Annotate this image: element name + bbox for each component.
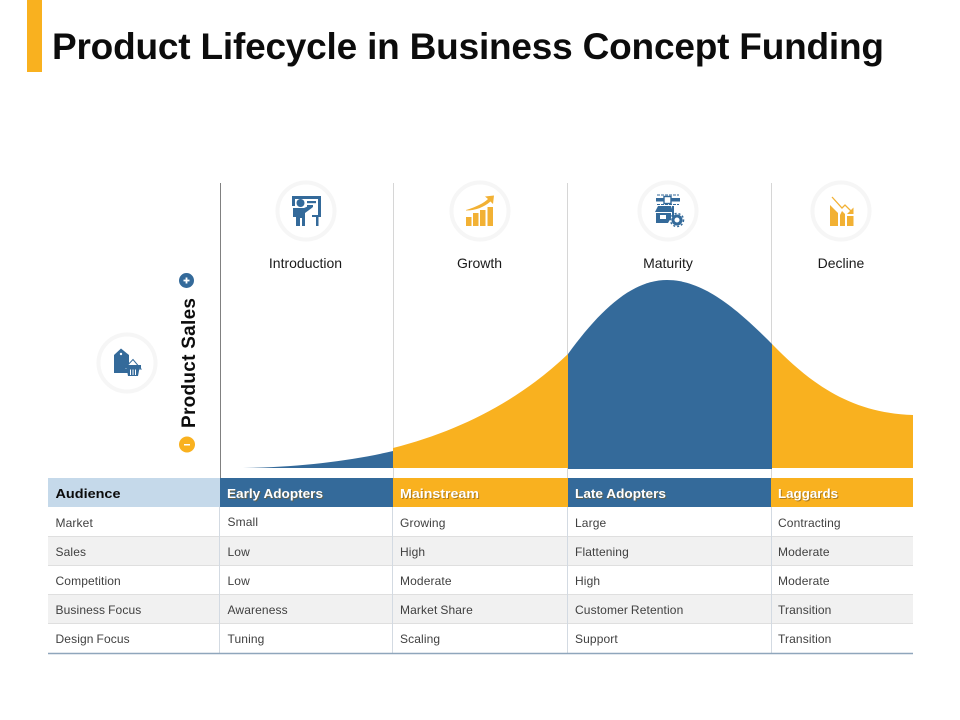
icon: decline bars and arrow <box>812 182 870 240</box>
table header row: Mainstream <box>400 486 479 501</box>
row: market: Small <box>228 515 258 529</box>
icon: minus marker <box>179 436 195 452</box>
row: competition: High <box>575 574 600 588</box>
row: business focus: Awareness <box>228 603 288 617</box>
table <box>48 478 913 654</box>
icon: plus marker <box>179 273 194 288</box>
row: business focus: Business Focus <box>56 603 141 617</box>
table header row: Early Adopters <box>227 486 323 501</box>
row: design focus: Tuning <box>228 632 264 646</box>
row: design focus <box>56 632 831 646</box>
table header row: Late Adopters <box>575 486 666 501</box>
table row shading <box>48 537 913 624</box>
table header row: Laggards <box>778 486 838 501</box>
curve segment: growth <box>393 354 568 468</box>
row: design focus: Scaling <box>400 632 440 646</box>
row: market: Large <box>575 516 606 530</box>
icon: introduction presenter <box>278 182 334 240</box>
table header row: Late Adopters <box>576 487 667 502</box>
table header row: Early Adopters <box>228 487 324 502</box>
table header row <box>48 478 913 507</box>
axis label: product sales: Product Sales <box>179 298 200 428</box>
row: competition: Competition <box>56 574 121 588</box>
row: design focus: Design Focus <box>56 632 130 646</box>
label: maturity: Maturity <box>643 255 693 271</box>
row: competition <box>56 574 830 588</box>
y axis line <box>220 183 222 478</box>
curve segment: decline <box>772 344 913 468</box>
table header row: Mainstream <box>401 487 480 502</box>
title: Product Lifecycle in Business Concept Funding <box>52 26 884 67</box>
label: decline: Decline <box>818 255 865 271</box>
label: growth: Growth <box>457 255 502 271</box>
icon: price tag and basket <box>98 334 156 392</box>
row: competition: Low <box>228 574 250 588</box>
row: sales <box>56 545 830 559</box>
curve segment: maturity <box>568 280 772 469</box>
row: market: Contracting <box>778 516 841 530</box>
row: business focus <box>56 603 831 617</box>
icon: growth bars and arrow <box>452 182 508 240</box>
row: competition: Moderate <box>400 574 452 588</box>
row: design focus: Transition <box>778 632 831 646</box>
row: market <box>56 515 841 530</box>
row: business focus: Transition <box>778 603 831 617</box>
table header row: Audience <box>56 486 120 501</box>
row: competition: Moderate <box>778 574 830 588</box>
stage dividers <box>394 183 772 478</box>
table header row: Laggards <box>779 487 839 502</box>
row: market: Growing <box>400 516 446 530</box>
curve segment: introduction <box>243 451 393 468</box>
label: introduction: Introduction <box>269 255 342 271</box>
row: sales: Flattening <box>575 545 629 559</box>
row: design focus: Support <box>575 632 618 646</box>
row: business focus: Market Share <box>400 603 473 617</box>
row: sales: High <box>400 545 425 559</box>
title accent bar <box>27 0 42 72</box>
lifecycle curve chart <box>243 280 913 469</box>
row: business focus: Customer Retention <box>575 603 683 617</box>
row: sales: Sales <box>56 545 86 559</box>
row: sales: Moderate <box>778 545 830 559</box>
icon: maturity box and gear <box>640 182 696 240</box>
row: sales: Low <box>228 545 250 559</box>
row: market: Market <box>56 516 93 530</box>
